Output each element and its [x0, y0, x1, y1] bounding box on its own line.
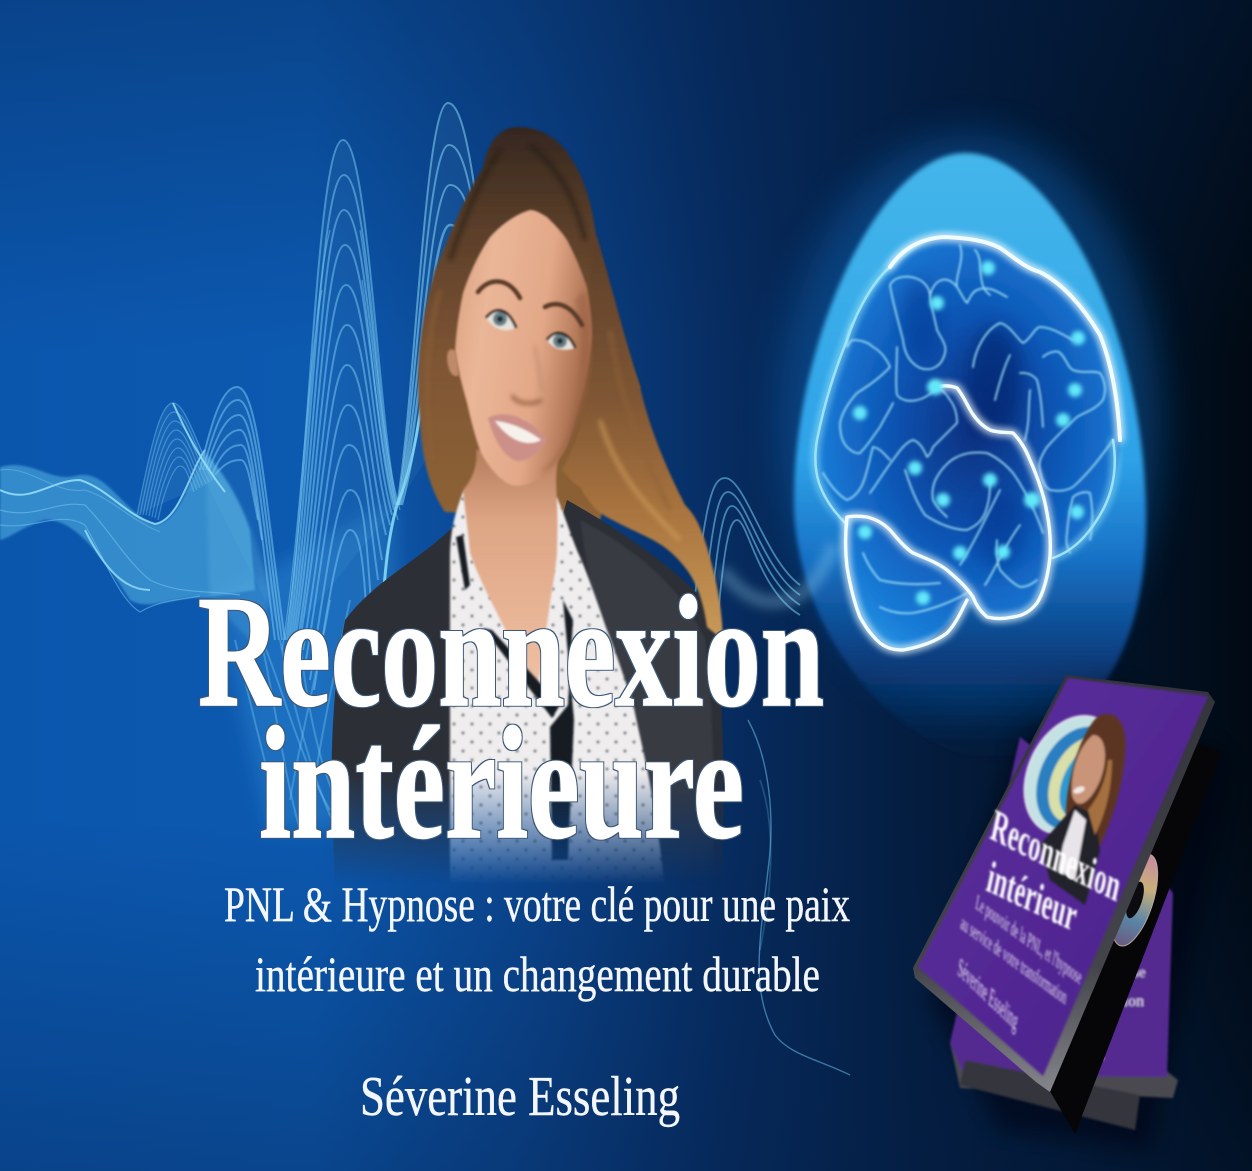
title: Reconnexion — [198, 562, 824, 740]
lower cases: s — [1098, 1047, 1104, 1064]
mouth — [488, 414, 547, 461]
author name: Séverine Esseling — [360, 1066, 680, 1128]
cover text: au service de votre transformation — [959, 911, 1068, 1010]
wave lines below the title — [235, 600, 350, 830]
brain — [815, 236, 1120, 650]
portrait of Séverine Esseling — [332, 127, 723, 890]
tie ribbon — [456, 535, 574, 860]
wave arch group 2 — [382, 103, 495, 620]
subtitle: PNL & Hypnose : votre clé pour une paix — [224, 876, 850, 932]
DVD stack — [913, 675, 1230, 1150]
lower cases: se — [1133, 965, 1146, 981]
dark lobes — [967, 325, 1023, 435]
neuron lights — [853, 261, 1085, 605]
brain body — [815, 236, 1120, 650]
cover text: Séverine Esseling — [956, 952, 1020, 1037]
wave mesh group 4 — [137, 403, 225, 520]
temporal lobe bright line — [846, 386, 1050, 650]
subtitle: intérieure et un changement durable — [255, 946, 820, 1002]
black case and disc — [1048, 742, 1222, 1134]
wave arch group 3 — [200, 387, 285, 640]
jacket lighter right — [581, 522, 713, 809]
wave arch group 1 — [282, 140, 400, 690]
outer glow — [780, 135, 1160, 705]
brain glow — [780, 135, 1160, 765]
hair strands — [427, 145, 680, 540]
cover spiral — [1006, 700, 1138, 850]
cover text: Reconnexion — [987, 801, 1125, 912]
ear — [447, 349, 459, 376]
halo egg — [794, 153, 1146, 765]
nose — [512, 345, 543, 403]
shirt — [450, 492, 665, 890]
bright outer line — [815, 267, 890, 525]
lower cases: ation — [1112, 993, 1144, 1010]
cover portrait — [1040, 714, 1126, 905]
front cover purple — [918, 678, 1208, 1076]
sound waves left of the portrait — [0, 103, 495, 830]
subtitle — [224, 876, 850, 1002]
hair front over the shoulder — [562, 235, 723, 640]
eyebrows — [478, 281, 582, 325]
eyes — [486, 311, 575, 350]
title: intérieure — [259, 694, 744, 873]
hair back — [418, 127, 640, 520]
thin folds — [823, 245, 1113, 613]
front cover frame — [913, 675, 1215, 1092]
wave haze behind the title — [215, 500, 400, 830]
drop shadow — [930, 680, 1230, 1150]
cover text — [956, 801, 1125, 1037]
lower cases — [950, 737, 1178, 1130]
wave ribbon — [0, 450, 270, 650]
wires linking waves and brain — [690, 478, 850, 1075]
jacket — [332, 500, 723, 890]
neck and chest — [463, 450, 560, 685]
cover text: Le pouvoir de la PNL, et l'hypnose — [974, 891, 1083, 990]
face shadow on right side — [544, 294, 588, 470]
cover text: intérieur — [983, 853, 1081, 941]
title — [198, 562, 824, 873]
face — [455, 210, 592, 486]
